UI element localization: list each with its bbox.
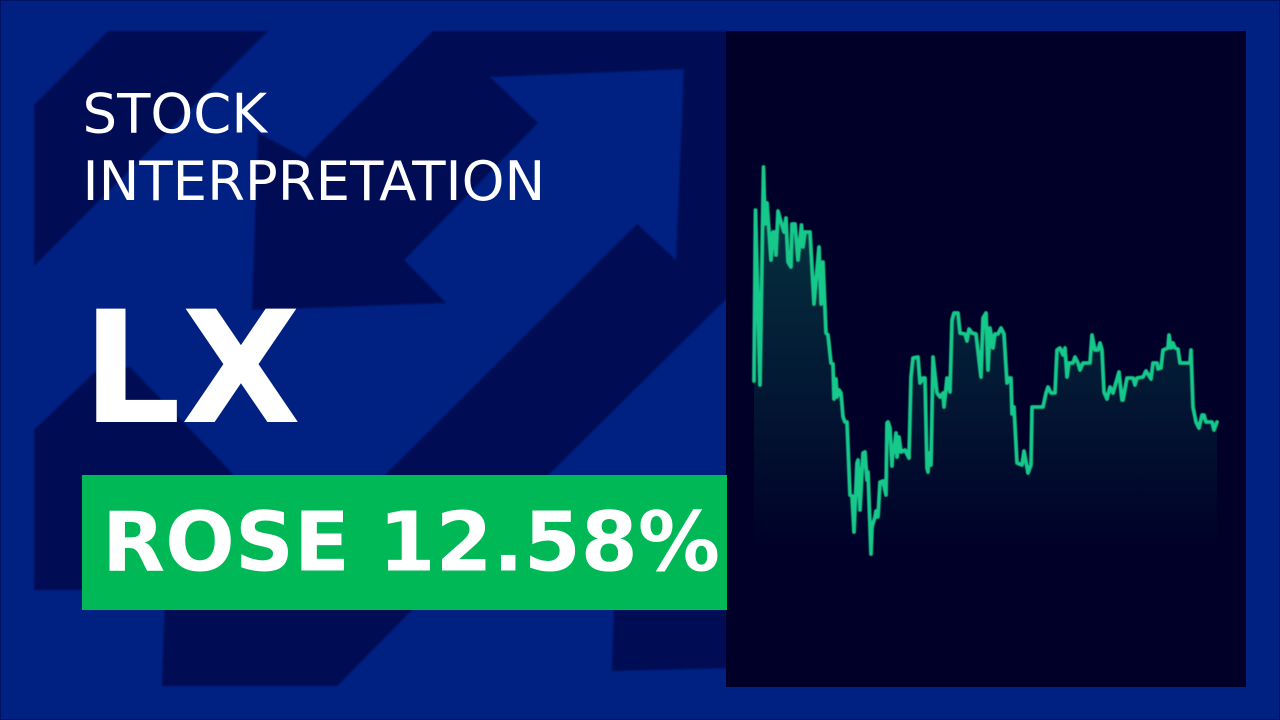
chart panel — [726, 31, 1246, 687]
title: STOCK — [82, 82, 268, 146]
title — [82, 82, 545, 213]
background arrows — [34, 31, 727, 686]
title: INTERPRETATION — [82, 149, 545, 213]
change badge — [82, 475, 727, 610]
area under price line — [754, 167, 1217, 554]
change badge: ROSE 12.58% — [102, 496, 720, 591]
price line — [754, 167, 1217, 554]
ticker: LX — [82, 278, 301, 459]
